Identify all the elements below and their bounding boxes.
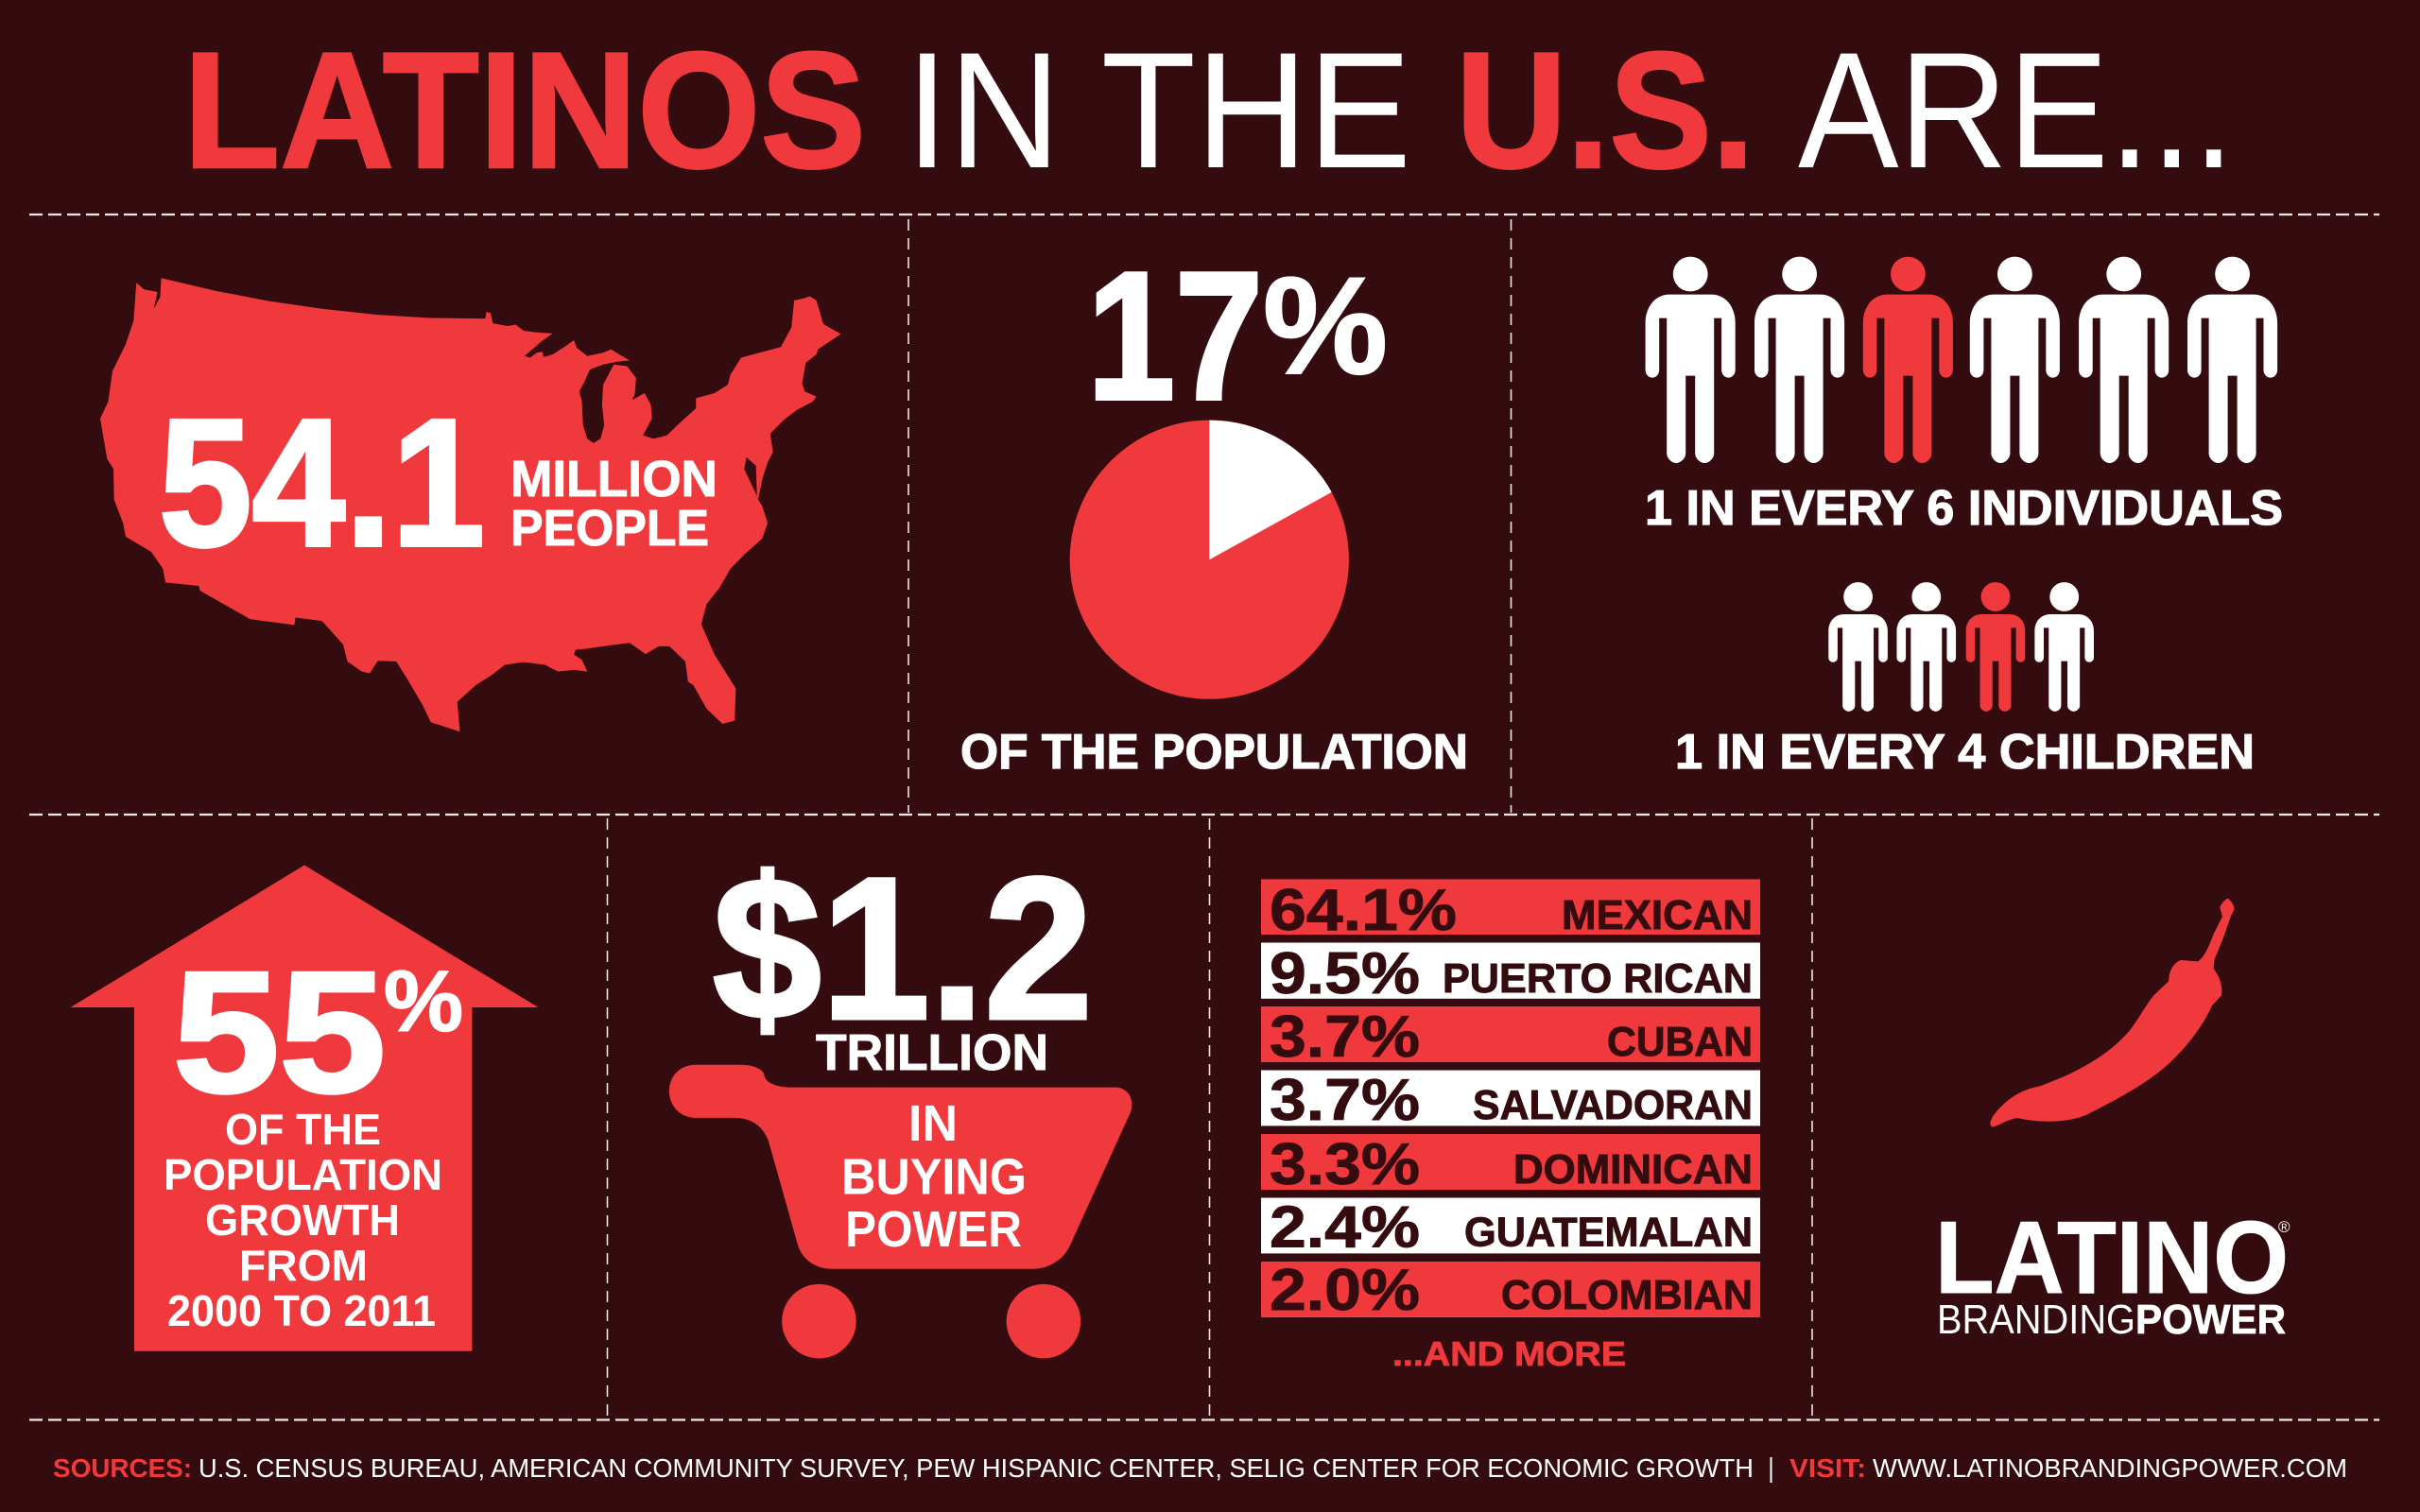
icon: shopping cart (669, 1065, 1132, 1358)
panel: individuals and children (1645, 257, 2283, 780)
logo wordmark: ® (2278, 1218, 2290, 1236)
text: of the population growth from 2000 to 2011 (164, 1105, 442, 1335)
title (183, 19, 2235, 203)
row: Mexican: 64.1% (1270, 878, 1457, 943)
number: 54.1: 54.1 (159, 381, 485, 584)
footer sources: VISIT: (1789, 1453, 1866, 1483)
row: Guatemalan: GUATEMALAN (1464, 1210, 1753, 1255)
row: Salvadoran: SALVADORAN (1473, 1082, 1753, 1128)
row: Guatemalan (1261, 1194, 1760, 1261)
text: in buying power: BUYING (841, 1149, 1027, 1206)
title: ARE... (1798, 19, 2235, 203)
panel: buying power (669, 835, 1132, 1358)
label: million people: MILLION (510, 451, 717, 507)
panel: population map (100, 278, 840, 731)
text: in buying power (841, 1095, 1027, 1258)
text: in buying power: POWER (845, 1201, 1022, 1258)
text: in buying power: IN (908, 1095, 958, 1152)
footer sources: SOURCES: (53, 1453, 192, 1483)
row: Cuban: CUBAN (1607, 1019, 1753, 1065)
footer sources: WWW.LATINOBRANDINGPOWER.COM (1873, 1453, 2347, 1483)
label: of the population: OF THE POPULATION (960, 725, 1468, 780)
text: of the population growth from 2000 to 2011: FROM (239, 1241, 368, 1290)
panel: origins table (1261, 878, 1760, 1373)
number: 55% (173, 936, 463, 1128)
row: Dominican: DOMINICAN (1513, 1146, 1753, 1193)
footer sources: U.S. CENSUS BUREAU, AMERICAN COMMUNITY SURVEY, PEW HISPANIC CENTER, SELIG CENTER FOR ECONOMIC GROWTH (199, 1453, 1754, 1483)
row: Colombian (1261, 1258, 1760, 1323)
row: Puerto Rican: PUERTO RICAN (1443, 955, 1753, 1002)
text: of the population growth from 2000 to 2011: 2000 TO 2011 (167, 1286, 436, 1335)
row: Cuban (1261, 1005, 1760, 1070)
number: 17%: % (1263, 249, 1388, 403)
text: of the population growth from 2000 to 2011: GROWTH (205, 1195, 400, 1245)
panel: logo (1935, 899, 2290, 1343)
row: Salvadoran (1261, 1068, 1760, 1133)
text: of the population growth from 2000 to 2011: OF THE (225, 1105, 381, 1154)
row: Salvadoran: 3.7% (1270, 1068, 1420, 1133)
panel: population growth arrow (70, 866, 538, 1351)
row: Mexican: MEXICAN (1562, 892, 1753, 938)
title: U.S. (1456, 19, 1754, 203)
number: 17%: 17 (1087, 233, 1263, 438)
text: of the population growth from 2000 to 2011: POPULATION (164, 1150, 442, 1199)
row: Colombian: COLOMBIAN (1501, 1272, 1753, 1318)
row: Mexican (1261, 878, 1760, 943)
label: 1 in every 6 individuals: 1 IN EVERY 6 INDIVIDUALS (1645, 481, 2283, 536)
map of the United States (100, 278, 840, 731)
row: Dominican (1261, 1132, 1760, 1197)
title: IN THE (906, 19, 1411, 203)
number: 55%: 55 (173, 936, 386, 1128)
logo wordmark: POWER (2135, 1297, 2286, 1343)
logo wordmark: BRANDING (1937, 1297, 2135, 1343)
arrow (70, 866, 538, 1351)
label: trillion: TRILLION (816, 1024, 1048, 1081)
number: $1.2: $1.2 (713, 835, 1093, 1062)
row: Puerto Rican: 9.5% (1270, 941, 1420, 1006)
pictogram: 1 in 6 individuals (1646, 257, 2277, 463)
number: 55%: % (384, 954, 463, 1050)
row: Cuban: 3.7% (1270, 1005, 1420, 1070)
icon: chili pepper (1990, 899, 2234, 1127)
label: million people (510, 451, 717, 557)
logo wordmark: LATINO (1935, 1200, 2289, 1315)
label: million people: PEOPLE (510, 500, 709, 557)
pictogram: 1 in 4 children (1828, 582, 2094, 712)
title: LATINOS (183, 19, 866, 203)
row: Guatemalan: 2.4% (1270, 1194, 1420, 1261)
row: Puerto Rican (1261, 941, 1760, 1006)
label: and more: ...AND MORE (1392, 1334, 1626, 1373)
number: 17% (1087, 233, 1388, 438)
pie chart (1070, 421, 1349, 699)
row: Colombian: 2.0% (1270, 1258, 1420, 1323)
footer sources (53, 1453, 2347, 1483)
panel: share of population (960, 233, 1468, 780)
row: Dominican: 3.3% (1270, 1132, 1420, 1197)
label: 1 in every 4 children: 1 IN EVERY 4 CHILDREN (1675, 725, 2255, 780)
